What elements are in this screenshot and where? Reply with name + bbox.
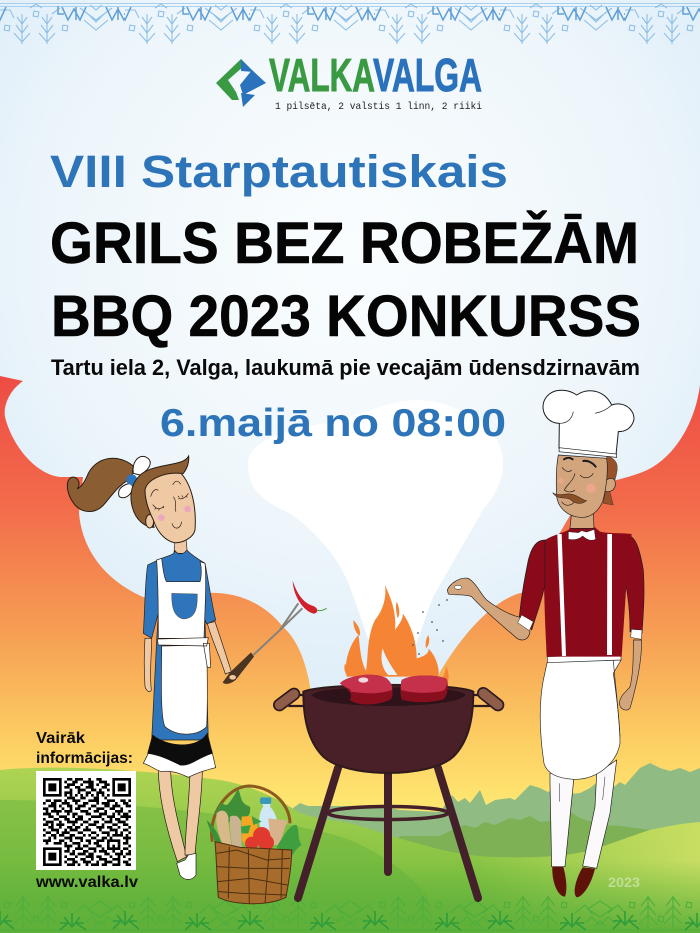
heading: VIII Starptautiskais: VIII Starptautiskais xyxy=(50,146,508,197)
basket handle xyxy=(212,786,290,842)
text: date and time: 6.maijā no 08:00 xyxy=(160,402,506,445)
chef right arm lower xyxy=(619,640,642,710)
chef hair xyxy=(603,455,617,505)
woman apron bib xyxy=(157,558,206,638)
chef left sleeve xyxy=(519,540,545,630)
character: woman xyxy=(67,456,327,879)
bottom ornament border xyxy=(0,893,700,933)
woman ribbon xyxy=(119,456,150,498)
background: white smoke plume xyxy=(248,400,503,650)
woman face xyxy=(145,473,195,543)
meat right xyxy=(400,675,448,702)
top ornament border xyxy=(0,0,700,50)
chef ear xyxy=(604,478,615,492)
basket greens xyxy=(207,789,250,845)
background: distant forest xyxy=(290,763,700,850)
woman shoes xyxy=(177,853,196,879)
QR code xyxy=(36,771,136,870)
basket bottle xyxy=(259,797,278,837)
grill bowl xyxy=(303,685,473,773)
grill legs and ring xyxy=(298,768,478,898)
logo wordmark second part: VALGA xyxy=(373,49,482,101)
woman ear xyxy=(146,515,154,528)
heading: Grils bez robežām: GRILS BEZ ROBEŽĀM xyxy=(50,211,639,276)
woman ponytail xyxy=(67,458,133,512)
chef torso xyxy=(544,526,632,657)
woman apron pocket xyxy=(172,593,197,619)
background: sky cloud xyxy=(0,0,700,700)
basket xyxy=(207,786,302,904)
chef cuff left xyxy=(518,615,533,631)
flames xyxy=(344,585,449,685)
woman skirt hem xyxy=(143,750,216,777)
grill xyxy=(279,585,498,898)
chef apron xyxy=(540,660,621,779)
label line 2: informācijas: xyxy=(36,750,133,767)
chef moustache xyxy=(553,493,587,503)
chef bow tie xyxy=(568,529,596,540)
chef cheeks xyxy=(558,478,596,493)
woman facial features xyxy=(151,481,188,528)
background: mid hills with trees xyxy=(385,812,650,870)
woman right arm xyxy=(207,622,231,674)
basket sticks xyxy=(268,818,287,845)
chef cuff right xyxy=(631,629,642,639)
woman left arm xyxy=(144,638,152,692)
chef neck xyxy=(570,512,594,528)
basket lettuce xyxy=(277,825,302,858)
woman skirt black band xyxy=(148,733,212,765)
chef right sleeve xyxy=(620,534,644,633)
woman legs xyxy=(158,768,187,862)
meat left xyxy=(340,675,393,704)
woman dress xyxy=(143,550,216,740)
basket carrots and pepper xyxy=(242,816,258,847)
woman waist band xyxy=(157,638,211,667)
basket apples xyxy=(245,827,274,851)
chef head xyxy=(556,455,607,517)
text: more information xyxy=(36,730,133,767)
chef hat xyxy=(543,390,634,455)
chili pepper xyxy=(293,581,327,614)
basket bread xyxy=(216,811,232,847)
chef left arm xyxy=(447,578,530,640)
text: location: Tartu iela 2, Valga, laukumā pie vecajām ūdensdzirnavām xyxy=(51,355,640,380)
logo: Valka Valga xyxy=(216,49,482,113)
woman fork xyxy=(223,603,302,684)
logo tagline: 1 pilsēta, 2 valstis 1 linn, 2 riiki xyxy=(275,101,482,113)
text: website: www.valka.lv xyxy=(35,874,138,891)
woman hair tie xyxy=(126,474,137,485)
grill handles xyxy=(279,693,498,706)
icon: logo diamond xyxy=(216,59,266,107)
text: year 2023: 2023 xyxy=(608,874,640,890)
woman cheeks xyxy=(158,506,191,521)
background: main green hills xyxy=(0,768,700,933)
character: chef xyxy=(447,390,644,897)
chef suspenders xyxy=(557,534,612,656)
label line 1: Vairāk xyxy=(36,730,85,747)
basket body xyxy=(215,842,292,904)
chef apron waistband xyxy=(547,654,621,663)
chef trousers xyxy=(550,773,573,867)
heading: BBQ 2023 konkurss: BBQ 2023 KONKURSS xyxy=(51,284,641,349)
woman neck xyxy=(174,538,187,553)
chef face details xyxy=(562,458,596,505)
chef shoes xyxy=(552,867,566,897)
woman apron skirt xyxy=(161,645,207,734)
woman hair xyxy=(131,456,189,527)
logo wordmark: VALKA xyxy=(269,49,375,101)
grill grate xyxy=(312,687,466,706)
salt specks xyxy=(412,599,448,655)
